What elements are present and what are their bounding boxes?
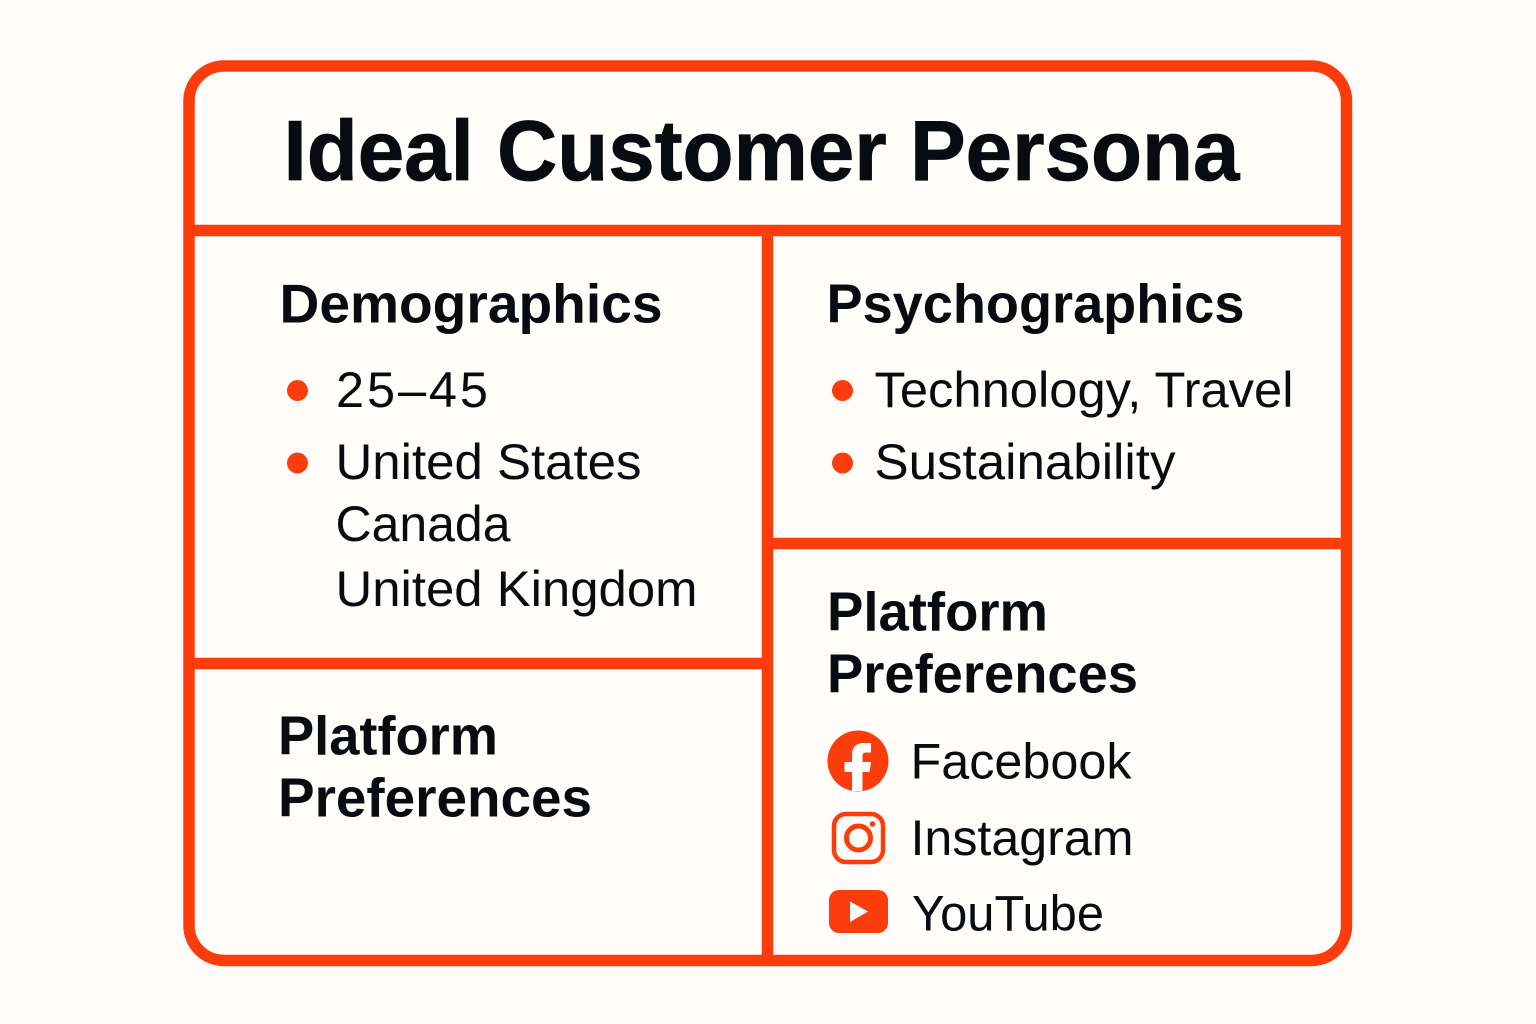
icon: youtube — [829, 890, 888, 933]
list item: technology and travel: Technology, Travel — [874, 361, 1294, 418]
heading: platform preferences right — [827, 582, 1138, 704]
title: Ideal Customer Persona — [284, 104, 1240, 199]
list item: countries: United Kingdom — [336, 560, 698, 617]
label: facebook: Facebook — [910, 732, 1132, 790]
panel: psychographics — [826, 274, 1294, 490]
heading: platform preferences left: Platform — [278, 706, 498, 766]
label: youtube: YouTube — [912, 884, 1104, 942]
persona card frame — [189, 66, 1346, 960]
icon: facebook — [828, 730, 888, 792]
heading: platform preferences left: Preferences — [278, 768, 592, 828]
label: instagram: Instagram — [910, 809, 1134, 866]
panel: demographics — [280, 274, 698, 617]
heading: platform preferences right: Platform — [827, 582, 1048, 642]
heading: platform preferences right: Preferences — [827, 644, 1138, 704]
heading: demographics: Demographics — [280, 274, 662, 334]
list item: age range: 25–45 — [336, 361, 488, 418]
panel: platform preferences (left, empty) — [278, 706, 592, 828]
heading: platform preferences left — [278, 706, 592, 828]
heading: psychographics: Psychographics — [826, 274, 1244, 334]
list item: countries — [287, 433, 698, 617]
icon: instagram — [834, 814, 883, 862]
list item: countries: Canada — [336, 495, 511, 552]
list item: sustainability: Sustainability — [874, 433, 1176, 490]
panel: platform preferences (right) — [827, 582, 1138, 942]
list item: countries: United States — [336, 433, 642, 490]
